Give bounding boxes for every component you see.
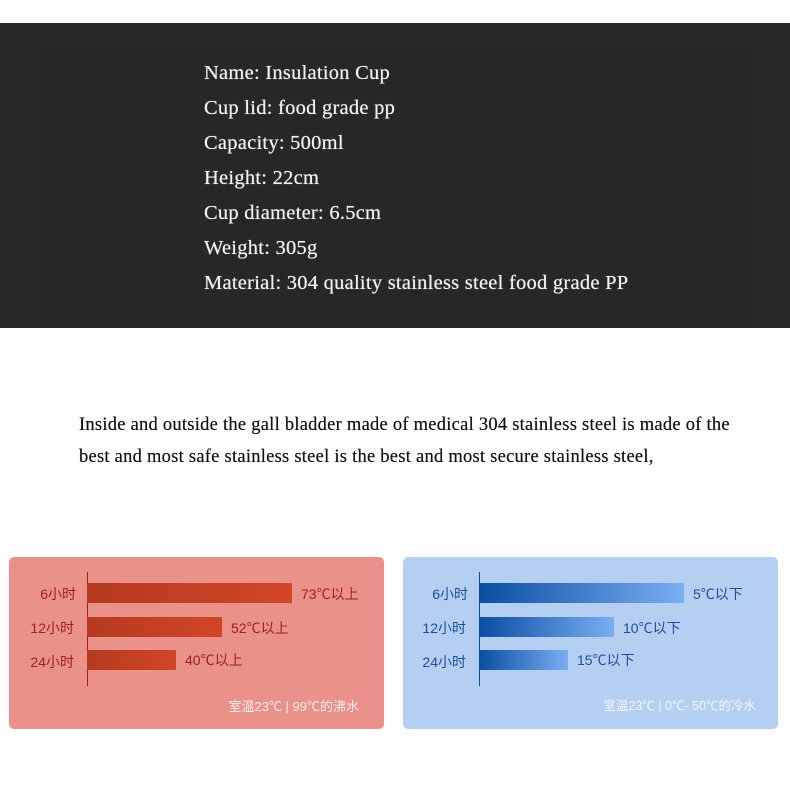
text: description	[78, 415, 730, 467]
bar: 6 hours	[87, 583, 292, 603]
bar: 24 hours	[479, 650, 568, 670]
caption: cold water: 室温23℃ | 0℃- 50℃的冷水	[603, 699, 756, 713]
bar: 12 hours	[87, 617, 222, 637]
text: weight: Weight: 305g	[204, 237, 318, 259]
label: 24 hours: 24小时	[30, 654, 74, 670]
label: 24 hours: 24小时	[422, 654, 466, 670]
text: height: Height: 22cm	[204, 167, 319, 189]
text: cup lid: Cup lid: food grade pp	[204, 97, 395, 119]
caption: hot water: 室温23℃ | 99℃的沸水	[228, 699, 359, 714]
text: cup diameter: Cup diameter: 6.5cm	[204, 202, 381, 224]
text: name: Name: Insulation Cup	[204, 62, 390, 84]
value: 40°C: 40℃以上	[185, 652, 243, 668]
text: material: Material: 304 quality stainless steel food grade PP	[204, 272, 628, 294]
label: 12 hours: 12小时	[30, 620, 74, 636]
axis line	[87, 572, 88, 686]
text: description: Inside and outside the gall bladder made of medical 304 stainless steel is made of the	[79, 415, 730, 435]
panel: cold water chart	[403, 557, 778, 729]
label: 6 hours: 6小时	[40, 586, 76, 602]
bar: 12 hours	[479, 617, 614, 637]
value: 5°C: 5℃以下	[693, 586, 743, 602]
value: 73°C: 73℃以上	[301, 586, 359, 602]
value: 10°C: 10℃以下	[623, 620, 681, 636]
label: 6 hours: 6小时	[432, 586, 468, 602]
text: description: best and most safe stainless steel is the best and most secure stainless steel,	[79, 447, 654, 467]
text: capacity: Capacity: 500ml	[204, 132, 344, 154]
value: 15°C: 15℃以下	[577, 652, 635, 668]
panel: specifications	[0, 23, 790, 328]
bar: 24 hours	[87, 650, 176, 670]
value: 52°C: 52℃以上	[231, 620, 289, 636]
panel: hot water chart	[9, 557, 384, 729]
axis line	[479, 572, 480, 686]
bar: 6 hours	[479, 583, 684, 603]
label: 12 hours: 12小时	[422, 620, 466, 636]
